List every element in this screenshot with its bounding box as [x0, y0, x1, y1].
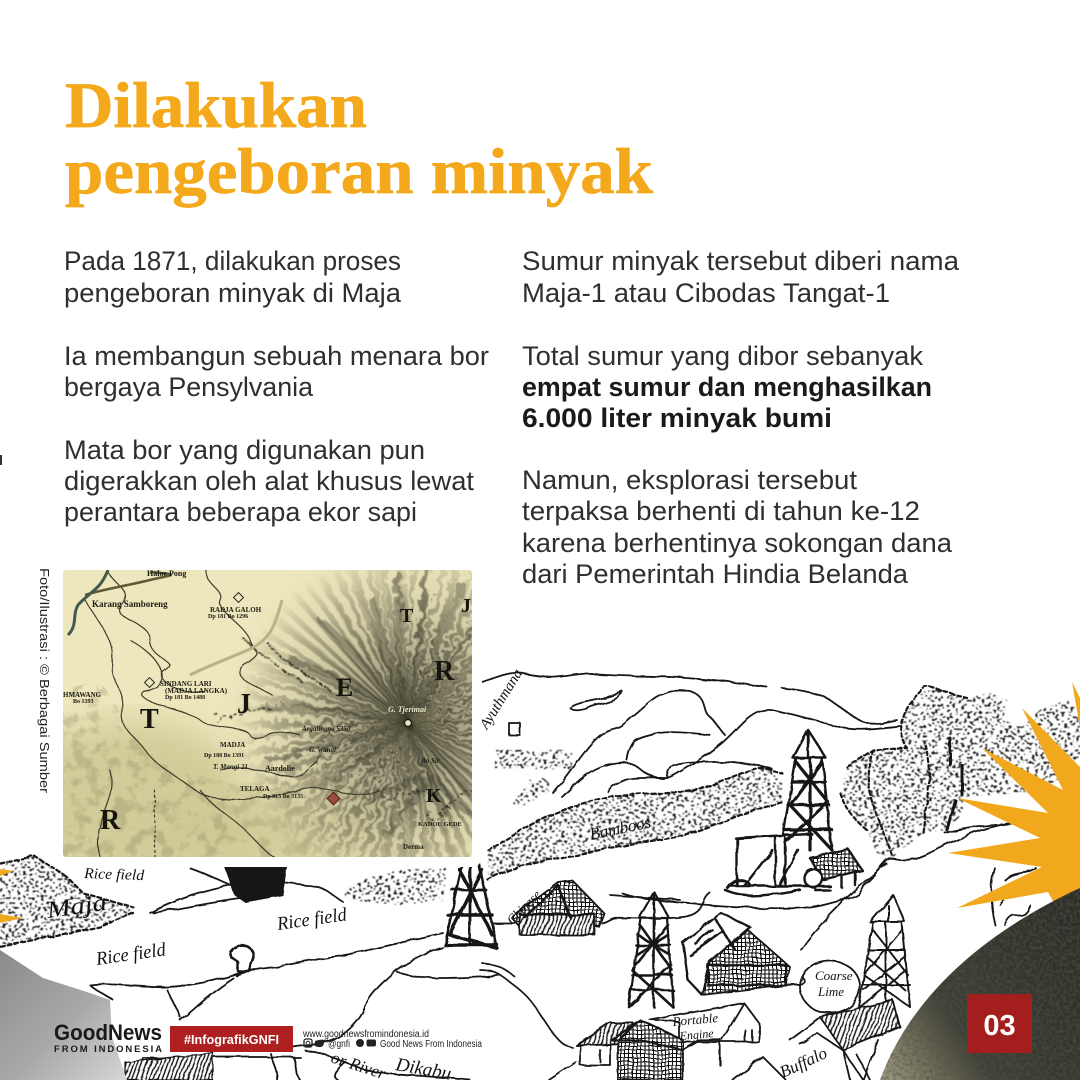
vegetation outlines	[0, 687, 967, 947]
footer: GoodNews logo: GoodNews	[54, 1020, 162, 1045]
white halo behind map	[50, 555, 482, 867]
icon: instagram	[304, 1039, 312, 1047]
handwritten sketch labels: Ayuthmana	[476, 666, 526, 733]
handwritten sketch labels: Rice field	[275, 904, 348, 935]
icon: twitter	[315, 1040, 325, 1047]
page number badge	[967, 994, 1032, 1053]
map place names: T. Mangi 21	[213, 763, 248, 771]
paragraph: total wells: empat sumur dan menghasilkan	[522, 372, 932, 402]
footer: hashtag badge	[170, 1026, 293, 1052]
map large letters: T	[140, 704, 159, 735]
map place names: Argalingga 5350	[301, 725, 351, 733]
handwritten sketch labels: Lime	[817, 984, 844, 999]
map place names: Derma	[403, 843, 424, 851]
paragraph: 1871 drilling: Pada 1871, dilakukan proses	[64, 246, 401, 276]
map large letters: J	[237, 689, 251, 720]
paragraph: Pennsylvania derrick: Ia membangun sebuah menara bor	[64, 341, 489, 371]
map place names: G. Tjerimai	[388, 705, 427, 714]
right ground lines	[480, 820, 1036, 1047]
stippled vegetation: bamboo, trees, bushes	[0, 687, 1080, 947]
footer: GoodNews logo: FROM INDONESIA	[54, 1044, 162, 1055]
map place names: (MADJA LANGKA)	[165, 687, 228, 695]
paragraph: well name: Sumur minyak tersebut diberi nama	[522, 246, 959, 276]
engine buildings	[549, 1003, 759, 1080]
map large letters: K	[426, 785, 442, 807]
starburst: orange accent	[948, 682, 1080, 950]
footer: web and social: www.goodnewsfromindonesia.id	[302, 1029, 429, 1040]
handwritten sketch labels: Maja	[44, 890, 108, 924]
map place names: Dp 813 Bo 3135	[263, 794, 303, 800]
paragraph: exploration halted: terpaksa berhenti di tahun ke-12	[522, 496, 920, 526]
map place names: Dp 181 Bo 1488	[165, 695, 205, 701]
paragraph: drill bit: digerakkan oleh alat khusus lewat	[64, 466, 475, 496]
handwritten sketch labels: Coarse	[815, 968, 853, 983]
map large letters: R	[434, 656, 455, 687]
paragraph: total wells: 6.000 liter minyak bumi	[522, 403, 832, 433]
footer: web and social: Good News From Indonesia	[380, 1039, 482, 1050]
paragraph: 1871 drilling: pengeboran minyak di Maja	[64, 278, 401, 308]
historical map of Maja	[63, 570, 472, 857]
paragraph: exploration halted	[522, 465, 952, 589]
icon: facebook	[356, 1039, 364, 1047]
map markers	[145, 593, 412, 805]
hut 2	[683, 913, 804, 995]
hills	[482, 673, 901, 797]
handwritten sketch labels: Chinese	[504, 887, 544, 927]
map large letters: E	[336, 673, 353, 702]
map place names: Bo Sir	[420, 757, 440, 765]
footer: web and social: @gnfi	[328, 1039, 350, 1050]
sketch background: oil field drawing	[0, 673, 1080, 1080]
derrick tower B	[629, 892, 673, 1007]
map place names: Bo 1393	[73, 699, 94, 705]
map place names: RADJA GALOH	[210, 606, 262, 614]
map place names: Dp 181 Bo 1296	[208, 614, 248, 620]
map place names: TELAGA	[240, 785, 270, 793]
hut 1	[511, 880, 604, 935]
derrick tower C	[859, 895, 910, 1007]
paragraph: drill bit	[64, 435, 475, 527]
handwritten sketch labels: Rice field	[83, 866, 145, 884]
map road tan	[85, 572, 282, 675]
paragraph: exploration halted: karena berhentinya sokongan dana	[522, 528, 952, 558]
map rivers and roads	[85, 570, 380, 857]
paragraph: Pennsylvania derrick	[64, 341, 489, 402]
starburst fragments: left edge	[0, 869, 23, 923]
handwritten sketch labels	[44, 666, 853, 1080]
map large letters: T	[400, 605, 414, 627]
paragraph: total wells	[522, 341, 932, 433]
edge tick mark	[0, 455, 2, 465]
footer: GoodNews logo	[54, 1020, 162, 1055]
paragraph: Pennsylvania derrick: bergaya Pensylvania	[64, 372, 313, 402]
paragraph: drill bit: Mata bor yang digunakan pun	[64, 435, 425, 465]
handwritten sketch labels: Portable	[671, 1010, 719, 1029]
handwritten sketch labels: Rice field	[94, 939, 167, 970]
map place names: Dp 188 Bo 1391	[204, 753, 244, 759]
derrick tower D	[445, 858, 497, 948]
left ground lines	[90, 868, 500, 1080]
map place names: G. Wangi	[309, 746, 336, 754]
map place names: Karang Samboreng	[92, 599, 168, 609]
page number badge: 03	[983, 1010, 1016, 1042]
title: pengeboran minyak	[65, 136, 654, 208]
map place names: SINDANG LARI	[160, 680, 212, 688]
title: Dilakukan	[65, 70, 367, 142]
paragraph: drill bit: perantara beberapa ekor sapi	[64, 497, 417, 527]
icon: youtube	[366, 1040, 376, 1046]
map place names: HMAWANG	[63, 691, 102, 699]
text column: right	[522, 246, 959, 589]
paragraph: exploration halted: dari Pemerintah Hindia Belanda	[522, 559, 908, 589]
paragraph: exploration halted: Namun, eksplorasi tersebut	[522, 465, 858, 495]
map ridges	[298, 613, 518, 833]
photo shape: bottom right dark	[880, 888, 1080, 1080]
title	[65, 70, 654, 208]
paragraph: well name: Maja-1 atau Cibodas Tangat-1	[522, 278, 890, 308]
map large letters: J	[461, 595, 471, 617]
derrick tower A	[725, 730, 862, 896]
handwritten sketch labels: Engine	[678, 1026, 715, 1043]
paragraph: well name	[522, 246, 959, 308]
map place names: Aardolie	[265, 764, 295, 773]
paragraph: total wells: Total sumur yang dibor sebanyak	[522, 341, 924, 371]
lower right structures	[733, 961, 900, 1080]
map place names	[63, 569, 462, 851]
text column: left	[64, 246, 489, 527]
map large letters: R	[100, 805, 121, 836]
map place names: Haloe Pong	[147, 569, 186, 578]
photo credit: Foto/Ilustrasi : © Berbagai Sumber	[37, 568, 52, 794]
map place names: KADOE GEDE	[418, 821, 462, 828]
paragraph: 1871 drilling	[64, 246, 401, 308]
footer: web and social	[302, 1029, 482, 1050]
footer: hashtag badge: #InfografikGNFI	[184, 1032, 279, 1047]
map large letters	[100, 595, 471, 836]
map place names: MADJA	[220, 741, 245, 749]
photo shape: bottom left grey	[0, 950, 127, 1080]
handwritten sketch labels: Bamboos	[588, 812, 653, 844]
